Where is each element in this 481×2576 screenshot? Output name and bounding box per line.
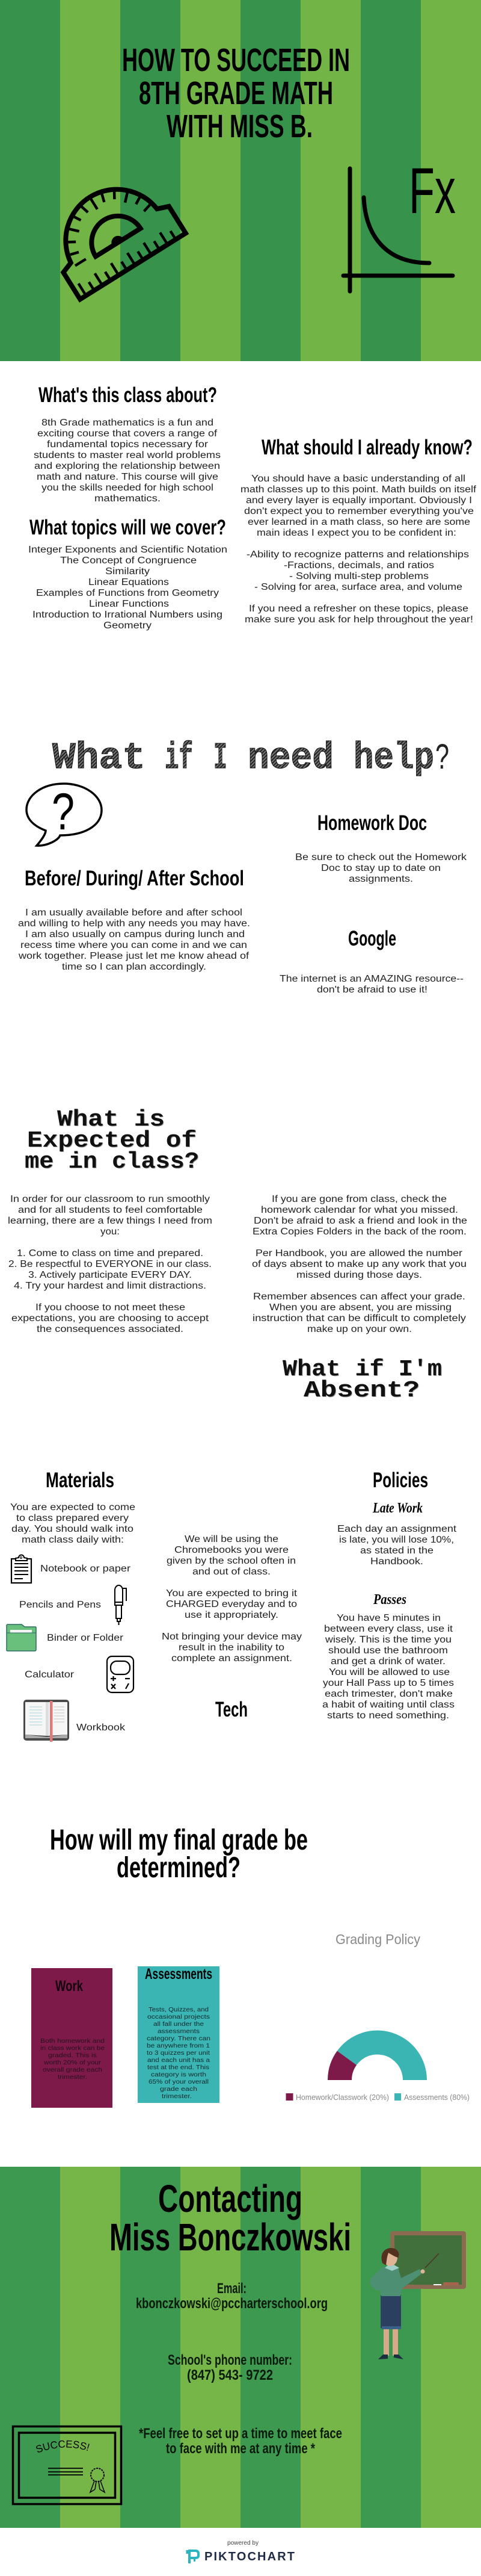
- panel: materials: You are expected to come: [10, 1502, 135, 1512]
- heading: what if I need help: if: [165, 737, 193, 779]
- panel: policies: as stated in the: [360, 1546, 434, 1556]
- panel: policies: Passes: [373, 1592, 406, 1608]
- icon: folder: [7, 1624, 36, 1651]
- text block: email: Email:: [217, 2280, 247, 2297]
- panel: policies: should use the bathroom: [328, 1646, 448, 1656]
- panel: assessments card: 65% of your overall: [149, 2078, 209, 2085]
- panel: tech: Not bringing your device may: [162, 1632, 302, 1642]
- panel: assessments card: and each unit has a: [147, 2057, 210, 2064]
- panel: assessments card: grade each: [160, 2085, 197, 2093]
- panel: before during after school: Before/ During/ After School: [25, 867, 244, 890]
- text block: classroom expectations: 3. Actively participate EVERY DAY.: [28, 1270, 192, 1280]
- panel: policies: wisely. This is the time you: [325, 1635, 452, 1645]
- heading: what if I'm absent: [283, 1357, 442, 1404]
- title: [122, 42, 350, 144]
- text block: meet face to face: to face with me at any time *: [166, 2441, 316, 2457]
- panel: work card: [31, 1968, 112, 2108]
- panel: before during after school: I am usually available before and after school: [25, 908, 242, 918]
- panel: what should I already know: - Solving multi-step problems: [289, 571, 429, 581]
- chart: grading policy semi-donut: [286, 1931, 470, 2102]
- text block: absence guidance: of days absent to make up any work that you: [252, 1259, 467, 1269]
- heading: what is expected of me in class: [25, 1107, 199, 1175]
- heading: what if I need help: ?: [435, 737, 449, 776]
- heading: how will my final grade be determined: determined?: [117, 1852, 240, 1884]
- footer: powered by piktochart: [188, 2539, 295, 2563]
- text block: meet face to face: *Feel free to set up a time to meet face: [139, 2426, 342, 2442]
- panel: what topics will we cover: Introduction to Irrational Numbers using: [32, 610, 222, 620]
- heading: how will my final grade be determined: [50, 1824, 308, 1884]
- panel: policies: starts to need something.: [327, 1711, 449, 1721]
- panel: what's this class about: you the skills needed for high school: [41, 483, 213, 493]
- footer: powered by piktochart: powered by: [227, 2539, 259, 2547]
- panel: what topics will we cover: What topics will we cover?: [29, 516, 226, 539]
- panel: materials: [7, 1469, 135, 1742]
- text block: absence guidance: missed during those days.: [296, 1270, 422, 1280]
- text block: classroom expectations: 1. Come to class on time and prepared.: [17, 1248, 203, 1259]
- panel: policies: each trimester, don't make: [325, 1689, 453, 1699]
- icon: pen: [115, 1585, 126, 1625]
- panel: what should I already know: -Ability to recognize patterns and relationships: [247, 550, 469, 560]
- icon: speech bubble with question mark: ?: [52, 783, 75, 841]
- icon: clipboard: [11, 1555, 31, 1583]
- panel: what's this class about: What's this class about?: [38, 383, 217, 407]
- panel: policies: You have 5 minutes in: [337, 1613, 441, 1623]
- panel: work card: trimester.: [58, 2073, 87, 2081]
- panel: before during after school: time so I can plan accordingly.: [62, 962, 206, 972]
- panel: assessments card: assessments: [158, 2028, 200, 2035]
- panel: homework doc: Be sure to check out the Homework: [295, 852, 467, 862]
- panel: what should I already know: - Solving for area, surface area, and volume: [254, 582, 462, 592]
- panel: assessments card: test at the end. This: [147, 2064, 209, 2071]
- text block: email: kbonczkowski@pccharterschool.org: [136, 2296, 328, 2312]
- panel: policies: your Hall Pass up to 5 times: [323, 1678, 454, 1688]
- icon: success diploma: [12, 2426, 123, 2505]
- heading: what is expected of me in class: What is: [57, 1107, 165, 1133]
- chart: grading policy semi-donut: Homework/Classwork (20%): [296, 2093, 389, 2102]
- panel: policies: and get a drink of water.: [331, 1656, 446, 1667]
- panel: work card: in class work can be: [40, 2045, 105, 2052]
- panel: what topics will we cover: Similarity: [105, 566, 150, 577]
- text block: absence guidance: instruction that can be difficult to completely: [253, 1313, 466, 1324]
- panel: policies: Policies: [373, 1469, 428, 1492]
- heading: what is expected of me in class: Expected of: [27, 1128, 197, 1154]
- panel: green striped header: [0, 0, 481, 361]
- text block: classroom expectations: In order for our classroom to run smoothly: [10, 1194, 210, 1204]
- panel: contact band: [0, 2167, 481, 2528]
- panel: policies: Each day an assignment: [337, 1524, 457, 1534]
- panel: assessments card: to 3 quizzes per unit: [147, 2049, 210, 2057]
- icon: calculator: [107, 1656, 133, 1692]
- text block: classroom expectations: [8, 1194, 212, 1334]
- panel: tech: use it appropriately.: [185, 1610, 278, 1620]
- panel: before during after school: I am also usually on campus during lunch and: [25, 929, 245, 940]
- text block: meet face to face: [139, 2426, 342, 2457]
- panel: google: The internet is an AMAZING resource--: [280, 974, 464, 984]
- panel: homework doc: Homework Doc: [317, 811, 427, 835]
- panel: policies: is late, you will lose 10%,: [339, 1535, 454, 1545]
- text block: classroom expectations: and for all students to feel comfortable: [18, 1205, 203, 1215]
- panel: tech: complete an assignment.: [171, 1653, 292, 1664]
- panel: what topics will we cover: Geometry: [103, 621, 152, 631]
- panel: work card: graded. This is: [48, 2052, 97, 2059]
- panel: what topics will we cover: Linear Functions: [89, 599, 169, 609]
- panel: before during after school: and willing to help with any needs you may have.: [18, 918, 250, 929]
- panel: assessments card: [138, 1966, 219, 2103]
- text block: classroom expectations: you:: [100, 1227, 120, 1237]
- heading: contacting miss bonczkowski: Contacting: [158, 2177, 302, 2220]
- panel: assessments card: category. There can: [147, 2035, 210, 2042]
- panel: homework doc: Doc to stay up to date on: [321, 863, 441, 873]
- panel: what's this class about: fundamental topics necessary for: [47, 439, 208, 450]
- title: WITH MISS B.: [167, 108, 313, 144]
- panel: google: Google: [348, 927, 396, 950]
- panel: what's this class about: math and nature. This course will give: [37, 472, 218, 482]
- panel: what should I already know: make sure you ask for help throughout the year!: [245, 615, 473, 625]
- heading: what if I'm absent: Absent?: [304, 1378, 420, 1404]
- panel: work card: Work: [55, 1978, 83, 1995]
- heading: what if I need help: [52, 737, 449, 779]
- panel: what should I already know: If you need a refresher on these topics, please: [249, 604, 468, 614]
- panel: homework doc: assignments.: [349, 874, 413, 884]
- icon: success diploma: SUCCESS!: [36, 2440, 90, 2453]
- panel: policies: between every class, use it: [324, 1624, 453, 1634]
- panel: tech: [162, 1534, 302, 1721]
- panel: tech: Tech: [215, 1698, 248, 1721]
- icon: teacher at chalkboard: [370, 2231, 466, 2359]
- text block: absence guidance: If you are gone from class, check the: [272, 1194, 447, 1204]
- text block: phone: School's phone number:: [168, 2352, 292, 2368]
- panel: materials: Binder or Folder: [47, 1633, 123, 1643]
- panel: what should I already know: ever learned in a math class, so here are some: [248, 517, 470, 527]
- panel: what topics will we cover: Linear Equations: [88, 577, 169, 587]
- panel: materials: Notebook or paper: [40, 1564, 130, 1574]
- text block: classroom expectations: expectations, you are choosing to accept: [11, 1313, 209, 1324]
- title: HOW TO SUCCEED IN: [122, 42, 350, 78]
- panel: google: [280, 927, 464, 995]
- text block: absence guidance: make up on your own.: [307, 1324, 412, 1334]
- text block: absence guidance: Don't be afraid to ask a friend and look in the: [254, 1216, 467, 1226]
- panel: before during after school: recess time where you can come in and we can: [20, 940, 247, 950]
- panel: tech: We will be using the: [185, 1534, 278, 1544]
- panel: tech: and out of class.: [192, 1567, 271, 1577]
- panel: materials: Calculator: [25, 1670, 74, 1680]
- heading: what if I'm absent: What if I'm: [283, 1357, 442, 1382]
- heading: what if I need help: I: [213, 737, 227, 779]
- icon: protractor: [37, 164, 186, 299]
- panel: what should I already know: and every layer is equally important. Obviously I: [246, 495, 472, 506]
- text block: email: [136, 2280, 328, 2312]
- panel: what should I already know: math classes up to this point. Math builds on itself: [240, 485, 477, 495]
- text block: absence guidance: Remember absences can affect your grade.: [253, 1292, 465, 1302]
- panel: assessments card: trimester.: [162, 2093, 192, 2100]
- footer: powered by piktochart: PIKTOCHART: [204, 2550, 295, 2563]
- icon: function graph: Fx: [409, 154, 456, 227]
- panel: assessments card: category is worth: [151, 2071, 206, 2078]
- panel: what should I already know: main ideas I expect you to be confident in:: [257, 528, 456, 538]
- panel: assessments card: occasional projects: [147, 2013, 210, 2020]
- panel: policies: Late Work: [372, 1500, 423, 1516]
- text block: classroom expectations: 2. Be respectful to EVERYONE in our class.: [8, 1259, 212, 1269]
- heading: what if I need help: help: [354, 737, 434, 779]
- heading: contacting miss bonczkowski: [109, 2177, 351, 2259]
- heading: what is expected of me in class: me in class?: [25, 1149, 199, 1175]
- panel: what's this class about: mathematics.: [94, 494, 161, 504]
- heading: what if I need help: What: [52, 737, 146, 779]
- text block: phone: [168, 2352, 292, 2383]
- panel: what topics will we cover: [28, 516, 227, 631]
- heading: contacting miss bonczkowski: Miss Bonczkowski: [109, 2215, 351, 2259]
- panel: tech: given by the school often in: [167, 1556, 296, 1566]
- panel: tech: CHARGED everyday and to: [166, 1599, 297, 1609]
- panel: what topics will we cover: Examples of Functions from Geometry: [36, 588, 219, 598]
- text block: classroom expectations: 4. Try your hardest and limit distractions.: [14, 1281, 206, 1291]
- panel: assessments card: Tests, Quizzes, and: [149, 2006, 209, 2013]
- panel: materials: math class daily with:: [22, 1535, 124, 1545]
- panel: before during after school: work together. Please just let me know ahead of: [18, 951, 250, 961]
- panel: homework doc: [295, 811, 467, 884]
- panel: assessments card: be anywhere from 1: [147, 2042, 210, 2049]
- panel: what should I already know: You should have a basic understanding of all: [251, 474, 465, 484]
- chart: grading policy semi-donut: Assessments (80%): [404, 2093, 470, 2102]
- panel: materials: to class prepared every: [16, 1513, 129, 1523]
- panel: what's this class about: exciting course that covers a range of: [37, 429, 218, 439]
- text block: classroom expectations: If you choose to not meet these: [35, 1302, 185, 1313]
- panel: what's this class about: students to master real world problems: [34, 450, 221, 460]
- text block: classroom expectations: the consequences associated.: [37, 1324, 183, 1334]
- text block: phone: (847) 543- 9722: [187, 2367, 273, 2383]
- icon: workbook: [23, 1700, 69, 1742]
- title: 8TH GRADE MATH: [139, 75, 333, 111]
- panel: materials: day. You should walk into: [11, 1524, 133, 1534]
- panel: what should I already know: don't expect you to remember everything you've: [244, 506, 474, 516]
- panel: policies: [322, 1469, 457, 1721]
- panel: what topics will we cover: The Concept of Congruence: [60, 556, 197, 566]
- panel: assessments card: all fall under the: [153, 2020, 204, 2028]
- text block: classroom expectations: learning, there are a few things I need from: [8, 1216, 212, 1226]
- panel: tech: result in the inability to: [179, 1643, 284, 1653]
- panel: tech: Chromebooks you were: [174, 1545, 289, 1555]
- icon: function graph: [343, 154, 456, 291]
- heading: how will my final grade be determined: How will my final grade be: [50, 1824, 308, 1856]
- panel: what's this class about: 8th Grade mathematics is a fun and: [41, 418, 213, 428]
- text block: absence guidance: When you are absent, you are missing: [269, 1302, 452, 1313]
- panel: what should I already know: [240, 436, 477, 625]
- panel: policies: You will be allowed to use: [329, 1667, 450, 1677]
- panel: policies: Handbook.: [370, 1556, 423, 1567]
- text block: absence guidance: Extra Copies Folders in the back of the room.: [253, 1227, 467, 1237]
- text block: absence guidance: homework calendar for what you missed.: [261, 1205, 458, 1215]
- panel: what's this class about: [34, 383, 221, 504]
- panel: work card: worth 20% of your: [43, 2059, 102, 2066]
- panel: policies: a habit of waiting until class: [322, 1700, 455, 1710]
- panel: work card: Both homework and: [40, 2037, 105, 2045]
- text block: absence guidance: Per Handbook, you are allowed the number: [256, 1248, 462, 1259]
- panel: work card: overall grade each: [43, 2066, 102, 2073]
- panel: tech: You are expected to bring it: [166, 1588, 298, 1599]
- panel: what topics will we cover: Integer Exponents and Scientific Notation: [28, 545, 227, 555]
- icon: piktochart logo: [188, 2550, 198, 2563]
- panel: materials: Materials: [46, 1469, 114, 1492]
- panel: assessments card: Assessments: [145, 1966, 212, 1983]
- panel: materials: Workbook: [76, 1723, 125, 1733]
- text block: absence guidance: [252, 1194, 467, 1334]
- heading: what if I need help: need: [248, 737, 334, 779]
- panel: materials: Pencils and Pens: [19, 1600, 101, 1610]
- panel: google: don't be afraid to use it!: [317, 985, 427, 995]
- panel: before during after school: [18, 867, 250, 972]
- icon: speech bubble with question mark: [26, 783, 102, 846]
- panel: what's this class about: and exploring the relationship between: [34, 461, 220, 471]
- chart: grading policy semi-donut: Grading Policy: [335, 1931, 420, 1947]
- panel: what should I already know: -Fractions, decimals, and ratios: [284, 560, 434, 571]
